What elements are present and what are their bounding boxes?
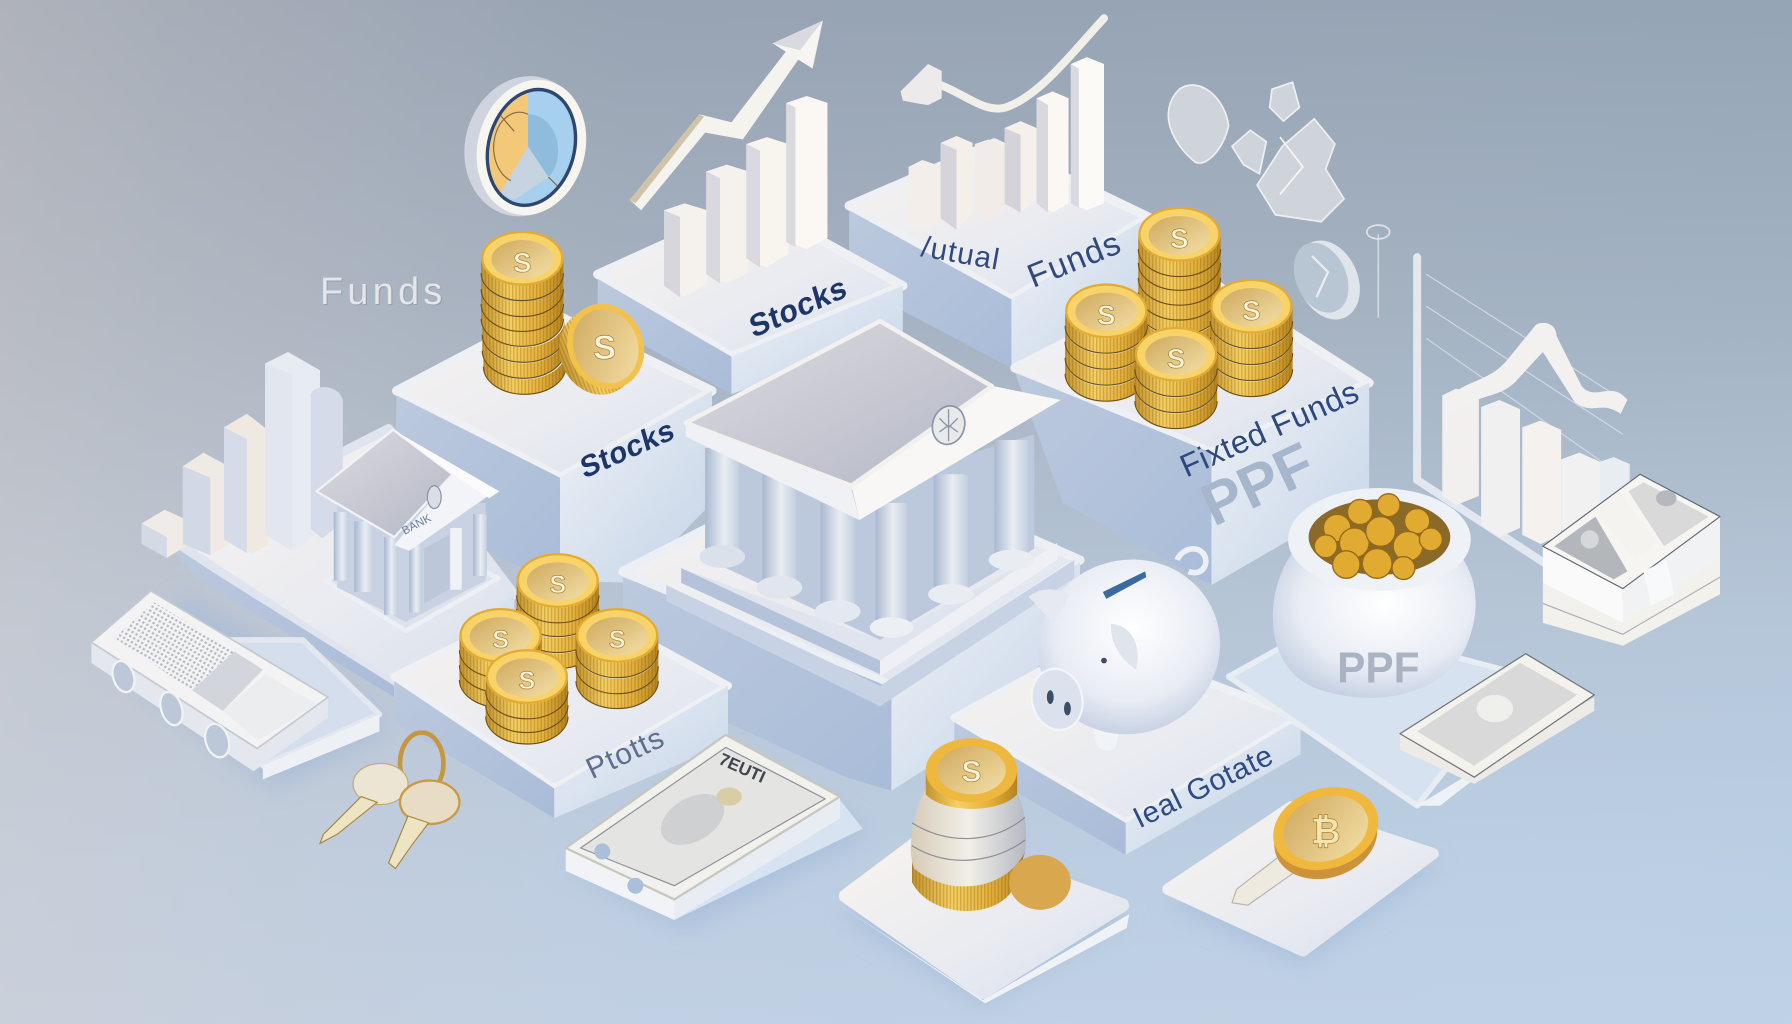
text: Real Estate: Ieal Gotate <box>1128 739 1279 835</box>
icon: cash slab on wheels <box>91 591 328 771</box>
panel: key platform <box>1168 774 1433 951</box>
text: PPF on pot: PPF <box>1337 644 1419 692</box>
text: Stocks upper: Stocks <box>745 269 851 345</box>
icon: key ring pair <box>320 733 459 869</box>
panel: stocks platform with rising bars <box>598 21 903 394</box>
floor shadows <box>137 594 1440 1006</box>
text: PPF: PPF <box>1191 429 1324 539</box>
panel: bank plinth <box>623 457 1080 791</box>
icon: coin stacks on fixed funds <box>1065 207 1293 429</box>
bank pediment <box>851 386 1061 520</box>
icon: coin stacks on fixed funds: S <box>1167 343 1185 374</box>
icon: piggy bank <box>1014 534 1245 760</box>
text: Fixed Funds: Fixted Funds <box>1174 373 1364 484</box>
icon: central bank building <box>666 321 1074 706</box>
panel: profits platform <box>394 594 728 818</box>
gold coins in pot <box>1314 494 1442 579</box>
panel: stocks platform with coins <box>394 311 712 583</box>
icon: bill details <box>581 747 825 894</box>
icon: small bank building <box>317 430 499 631</box>
icon: banknote <box>1400 654 1594 784</box>
icon: silver and gold coin tower <box>911 738 1071 911</box>
panel: coin tower platform <box>840 738 1129 1003</box>
icon: pie chart disc <box>464 76 586 216</box>
icon: coin stacks on fixed funds: S <box>1170 223 1189 254</box>
icon: coin stacks on profits: S <box>549 571 566 599</box>
bar chart: left buildings <box>142 352 343 558</box>
icon: leaning coin: S <box>593 329 616 367</box>
icon: coin stack on stocks <box>481 231 566 394</box>
icon: coin stacks on fixed funds: S <box>1242 295 1261 326</box>
trend curve: mutual funds <box>901 18 1104 109</box>
panel: piggy bank platform <box>954 640 1301 855</box>
decoration: thin marker <box>1367 225 1390 318</box>
panel: cash cart platform <box>91 591 379 779</box>
panel: mutual funds platform <box>849 18 1149 371</box>
icon: coin stacks on profits: S <box>609 626 626 654</box>
icon: faded coin <box>1283 230 1372 330</box>
icon: pot of gold <box>1273 488 1476 698</box>
panel: pot platform <box>1229 623 1543 806</box>
icon: leaning coin <box>546 292 657 406</box>
bank steps <box>666 543 1074 706</box>
text: Mutual Funds: /utual <box>919 230 1003 277</box>
bank roof <box>686 321 992 486</box>
icon: coin stacks on profits: S <box>518 667 535 695</box>
text: Profits: Ptotts <box>581 721 670 786</box>
icon: floating leaves <box>1168 82 1344 222</box>
bank emblem <box>928 402 969 448</box>
icon: coin stack on stocks: S <box>513 247 531 278</box>
icon: coin stacks on profits <box>459 553 658 744</box>
bank columns <box>699 440 1034 638</box>
bar chart: stocks <box>664 96 827 297</box>
chart: right declining bars with line <box>1417 257 1630 563</box>
icon: silver and gold coin tower: S <box>962 756 981 789</box>
text: Mutual Funds: Funds <box>1022 224 1127 295</box>
panel: left flat platform <box>171 429 514 699</box>
arrow: rising trend <box>630 21 823 210</box>
text: Mutual Funds <box>919 224 1127 295</box>
panel: fixed funds and PPF platform <box>1015 274 1369 585</box>
icon: small bank building: BANK <box>400 512 434 538</box>
icon: gold coin key <box>1232 774 1389 905</box>
icon: gold coin key: ₿ <box>1311 810 1341 851</box>
text: Stocks lower: Stocks <box>577 413 678 486</box>
icon: stacked banknotes <box>1543 474 1720 646</box>
icon: bill details: 7EUTI <box>716 749 769 787</box>
bar chart: mutual funds <box>909 57 1104 231</box>
icon: coin stacks on profits: S <box>492 626 509 654</box>
panel: cash note platform <box>566 735 863 920</box>
label: Funds: Funds <box>320 270 442 312</box>
icon: coin stacks on fixed funds: S <box>1097 300 1115 331</box>
label: Funds: Funds <box>321 271 443 313</box>
